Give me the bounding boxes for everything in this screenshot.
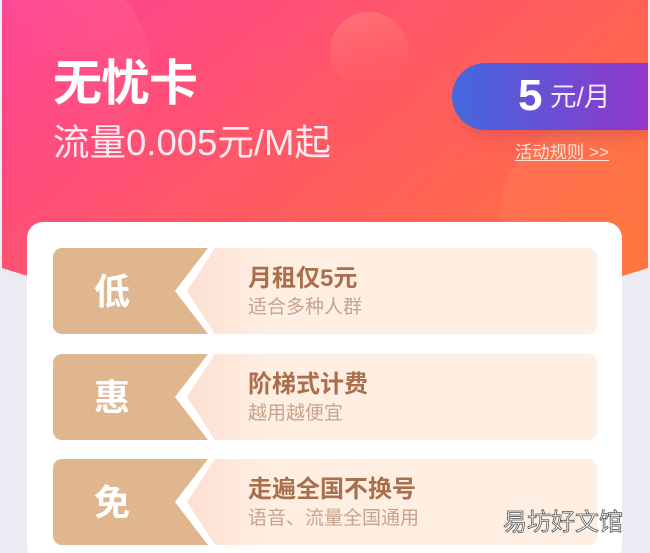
- price text: [518, 71, 610, 120]
- row: 惠: 阶梯式计费: [248, 371, 368, 398]
- row: 免: 走遍全国不换号: [248, 476, 416, 503]
- rules link: 活动规则 >>: [515, 142, 609, 162]
- row: 低: [53, 248, 597, 334]
- row: 免: 免: [94, 482, 130, 523]
- row: 惠: 越用越便宜: [248, 403, 343, 424]
- subtitle: 流量0.005元/M起: [53, 122, 331, 163]
- row: 惠: [53, 354, 597, 440]
- title: 无忧卡: [53, 57, 197, 111]
- header background: [2, 0, 648, 276]
- price pill: [452, 63, 648, 130]
- row: 低: 低: [94, 271, 130, 312]
- row: 免: 语音、流量全国通用: [248, 508, 419, 529]
- white card: [27, 222, 622, 553]
- row: 惠: 惠: [94, 377, 130, 418]
- row: 低: 月租仅5元: [248, 265, 357, 292]
- watermark: 易坊好文馆: [503, 509, 623, 536]
- row: 低: 适合多种人群: [248, 297, 362, 318]
- row: 免: [53, 459, 597, 545]
- price text: 元/月: [550, 82, 610, 112]
- price text: 5: [518, 71, 542, 120]
